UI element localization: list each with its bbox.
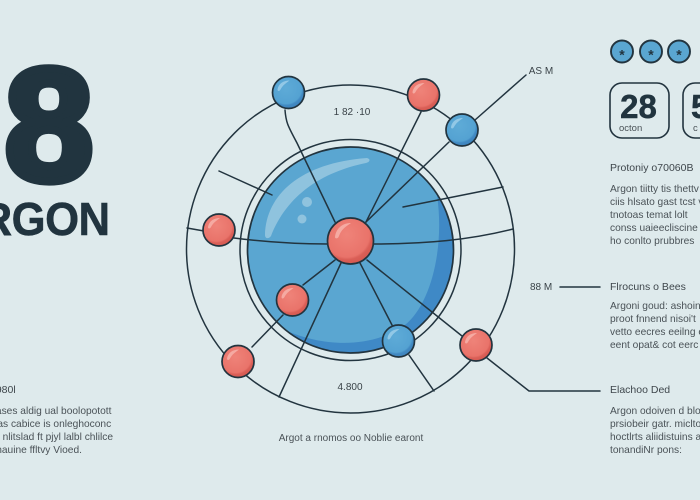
- stat card 28: 28: [620, 88, 657, 125]
- right text block: properties: [610, 162, 700, 247]
- right text block: properties: conss uaieecliscine: [610, 223, 698, 234]
- ring label bottom: 4.800: [337, 382, 363, 393]
- star icons: *: [676, 46, 682, 62]
- star icons: [611, 40, 690, 62]
- stat card 28: [610, 83, 669, 138]
- right text block: focus: 88 M: [530, 282, 552, 293]
- stat card 5: c: [693, 123, 698, 134]
- right text block: properties: Argon tiitty tis thettv: [610, 184, 700, 195]
- right text block: electron: Elachoo Ded: [610, 384, 670, 396]
- central nucleus ball: [328, 218, 374, 264]
- right text block: electron: prsiobeir gatr. miclto: [610, 419, 700, 430]
- right text block: focus: [530, 281, 700, 351]
- stat card 5: [683, 83, 700, 138]
- star icons: *: [619, 46, 625, 62]
- right text block: electron: Argon odoiven d blo: [610, 406, 700, 417]
- left text block: [0, 384, 113, 456]
- nucleus sphere: [248, 147, 454, 353]
- inner shell ring: [240, 140, 461, 360]
- right text block: focus: eent opat& cot eerc: [610, 340, 698, 351]
- outer shell ring: [186, 85, 514, 413]
- caption: Argot a rnomos oo Noblie earont: [279, 433, 423, 444]
- right text block: electron: tonandiNr pons:: [610, 445, 682, 456]
- electrons: [203, 76, 492, 378]
- right text block: properties: ho conlto prubbres: [610, 236, 694, 247]
- star icons: *: [648, 46, 654, 62]
- big atomic number 8: 8: [5, 35, 93, 214]
- atom diagram: [186, 75, 600, 413]
- right text block: properties: Protoniy o70060B: [610, 162, 693, 174]
- right text block: focus: Flrocuns o Bees: [610, 281, 686, 293]
- ring label top: 1 82 ·10: [334, 107, 371, 118]
- right text block: properties: tnotoas temat lolt: [610, 210, 688, 221]
- stat card 28: octon: [619, 123, 642, 134]
- right text block: focus: proot fnnend nisoi't: [610, 314, 696, 325]
- connector lines: [187, 75, 600, 397]
- right text block: electron: [610, 384, 700, 456]
- top-right label: AS M: [529, 66, 553, 77]
